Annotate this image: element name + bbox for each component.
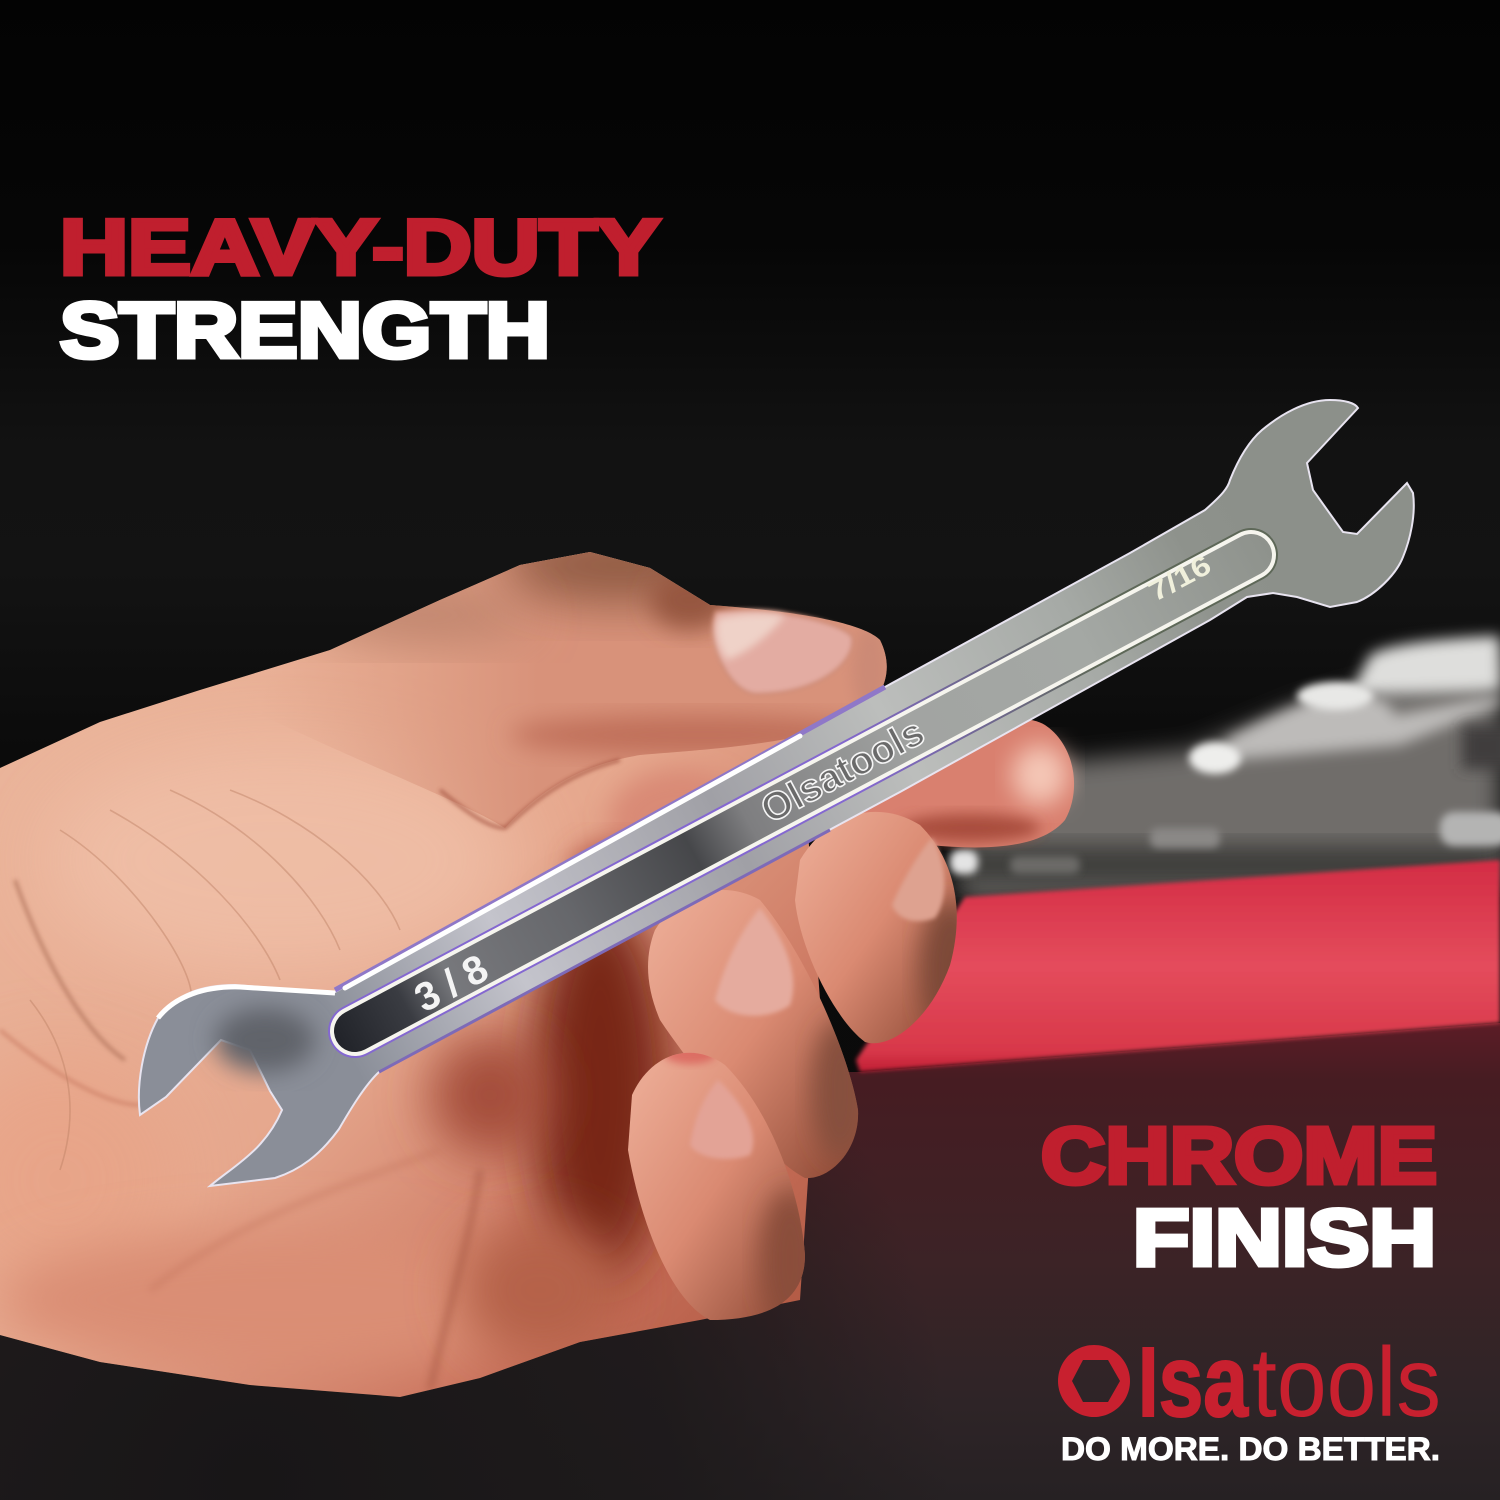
thumbnail pale half moon [716, 613, 785, 660]
logo letters tools: tools [1252, 1327, 1441, 1437]
Olsatools wrench stamp: Olsatools [754, 710, 931, 832]
left head shading [215, 1008, 315, 1072]
palm and back of hand [0, 552, 820, 1397]
HEAVY-DUTY: HEAVY-DUTY [60, 203, 660, 291]
thumb shading [310, 527, 890, 755]
logo hexagon O [1058, 1345, 1130, 1417]
heading: chrome finish [1041, 1111, 1437, 1282]
background: lower left dark fabric [0, 1074, 960, 1500]
index finger tip behind wrench [850, 718, 1074, 847]
background: blurred tool tray [950, 636, 1500, 900]
heading: heavy-duty strength [60, 203, 660, 374]
white reflection on left jaw [158, 987, 335, 1018]
tagline: DO MORE. DO BETTER. [1061, 1431, 1440, 1467]
thumbnail [713, 611, 853, 694]
background: dark fabric work surface [0, 1023, 1500, 1500]
middle finger [795, 812, 957, 1043]
ring fingernail [715, 908, 793, 1016]
logo: Olsatools [1058, 1324, 1441, 1467]
wrench body [139, 400, 1414, 1186]
wrench [139, 400, 1414, 1186]
handle groove [355, 555, 1251, 1031]
STRENGTH: STRENGTH [60, 286, 550, 374]
background: red foam tray [856, 860, 1500, 1072]
index fingertip highlight [1012, 745, 1068, 805]
purple highlight along top edge [335, 687, 885, 990]
hand [0, 527, 1074, 1397]
ring finger [648, 890, 858, 1178]
CHROME: CHROME [1041, 1111, 1437, 1200]
little finger [628, 1053, 805, 1320]
little finger shade [664, 1052, 805, 1310]
logo letters lsa: lsa [1138, 1324, 1249, 1438]
FINISH: FINISH [1133, 1193, 1436, 1282]
thumb and palm crease [440, 760, 620, 828]
little fingernail [690, 1080, 753, 1159]
index fingertip shadow [900, 814, 1040, 842]
7/16 size stamp: 7/16 [1143, 549, 1216, 607]
middle finger shade [907, 890, 957, 1018]
middle fingernail [892, 838, 944, 921]
palm shading [0, 740, 750, 1390]
purple highlight along bottom edge [379, 830, 830, 1072]
ring finger shade [812, 1020, 868, 1160]
3/8 size stamp: 3/8 [408, 946, 495, 1021]
thumb [329, 552, 887, 828]
white reflection along top edge [345, 736, 800, 988]
